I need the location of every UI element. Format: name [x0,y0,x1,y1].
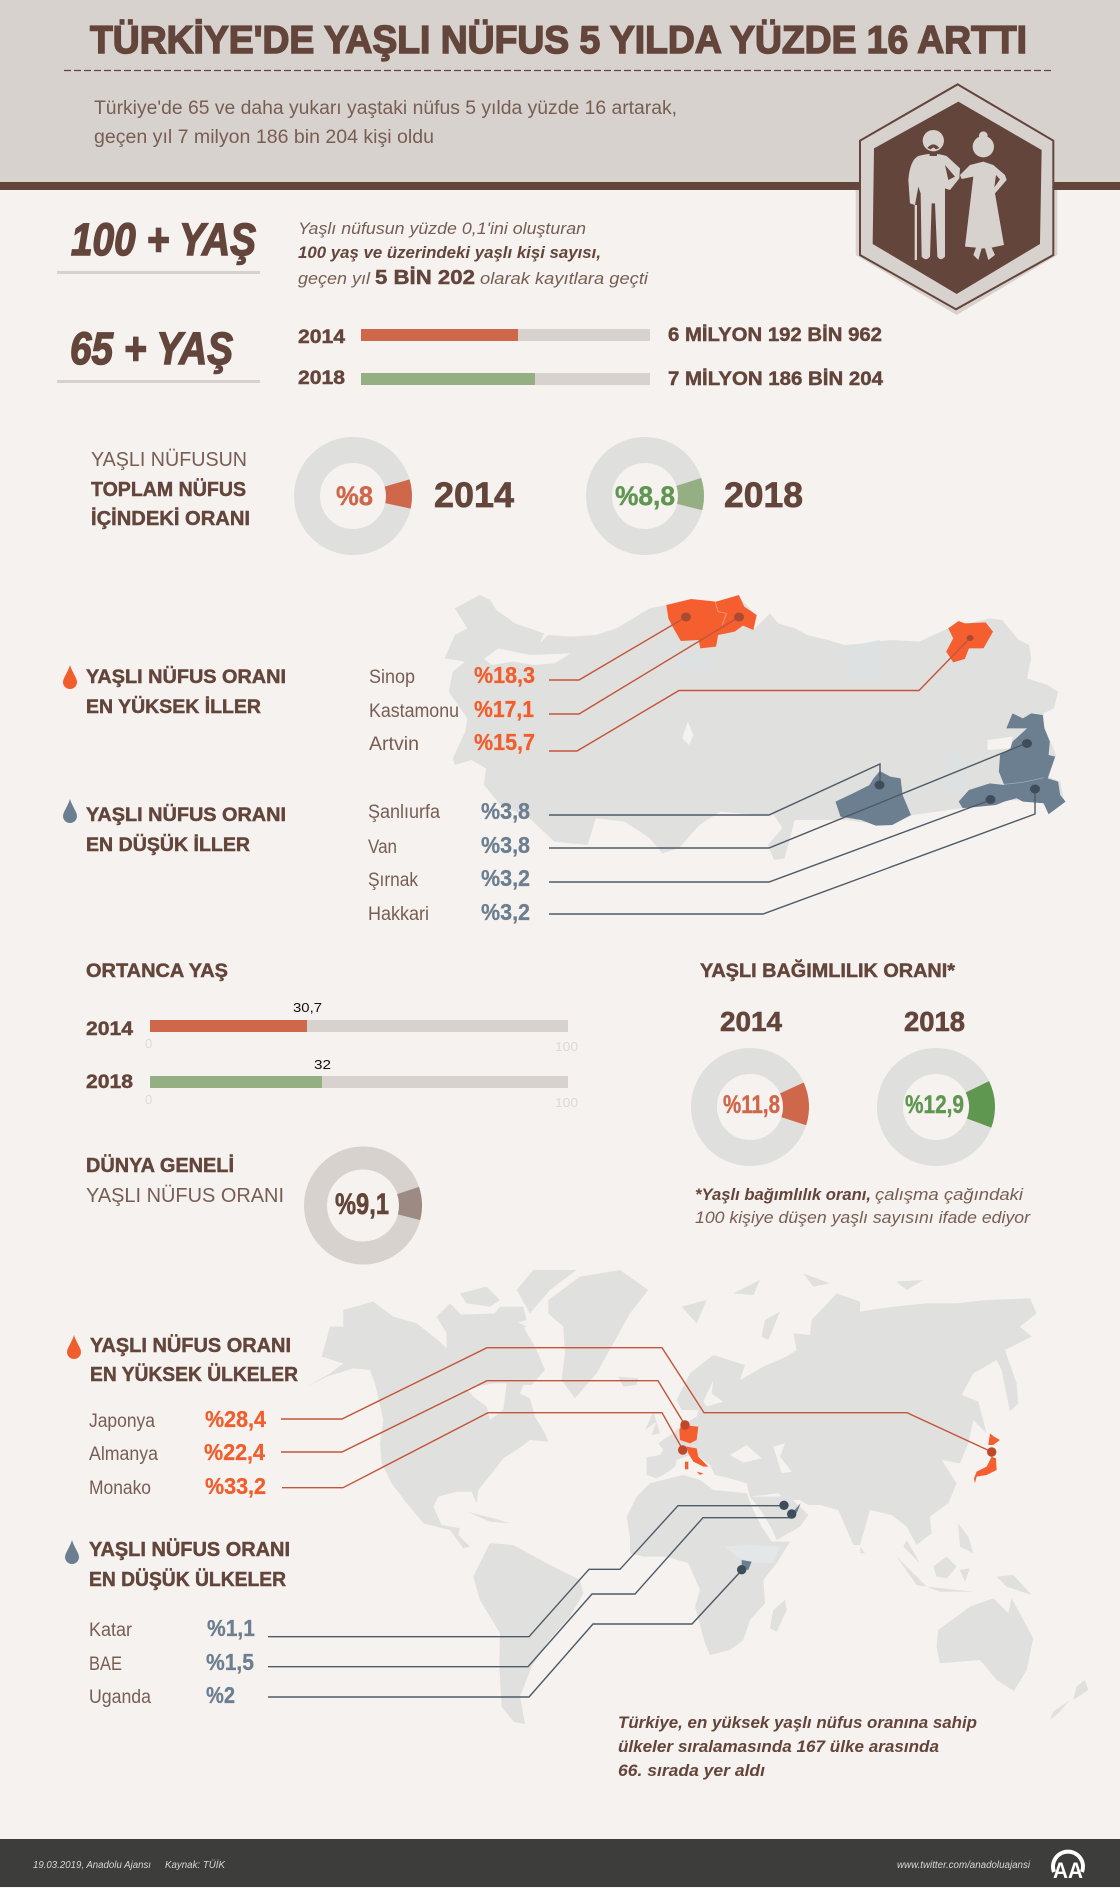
bar chart: 65+ population: 6 MİLYON 192 BİN 962 [668,325,882,346]
donut: world average: %9,1 [335,1188,389,1221]
share of total population label: YAŞLI NÜFUSUN [91,449,247,471]
list: lowest countries: %1,5 [206,1649,254,1675]
share of total population label [91,449,250,530]
100+ yaş description: Yaşlı nüfusun yüzde 0,1'ini oluşturan [298,219,586,238]
donut: dependency 2014 [689,1006,811,1168]
list: lowest provinces: %3,2 [481,899,530,925]
donut: world average [303,1145,423,1266]
list: highest provinces: %17,1 [474,696,534,722]
100+ yaş heading: 100 + YAŞ [71,214,256,265]
donut: 2014 share: %8 [336,481,373,511]
heading: lowest provinces: EN DÜŞÜK İLLER [86,835,250,856]
map: Türkiye [445,595,1066,860]
100+ yaş description: 100 yaş ve üzerindeki yaşlı kişi sayısı, [298,243,601,262]
list: highest provinces: Sinop [369,667,415,688]
list: lowest countries: Katar [89,1620,133,1641]
icon: Anadolu Agency logo: AA [1053,1858,1083,1883]
bar chart: median age [86,961,578,1110]
header panel [0,0,1120,190]
bar chart: median age: ORTANCA YAŞ [86,961,228,982]
share of total population label: TOPLAM NÜFUS [91,478,246,501]
subtitle text: Türkiye'de 65 ve daha yukarı yaştaki nüfus 5 yılda yüzde 16 artarak, [94,98,677,119]
bar chart: median age: 32 [314,1057,331,1072]
subtitle text: geçen yıl 7 milyon 186 bin 204 kişi oldu [94,127,434,148]
heading: lowest countries [65,1538,290,1591]
heading: highest provinces [63,665,286,718]
heading: highest countries: YAŞLI NÜFUS ORANI [90,1334,291,1357]
heading: lowest countries: EN DÜŞÜK ÜLKELER [89,1568,287,1591]
list: highest provinces: %18,3 [474,662,535,688]
callout: Türkiye ranking [618,1713,977,1780]
heading: lowest countries: YAŞLI NÜFUS ORANI [89,1538,290,1561]
heading: old-age dependency ratio: YAŞLI BAĞIMLILIK ORANI* [700,960,956,982]
donut: 2018 share [599,450,803,542]
heading: highest provinces: YAŞLI NÜFUS ORANI [86,667,286,688]
bar chart: median age: 2014 [86,1019,133,1040]
100+ yaş description: 5 BİN 202 [375,266,475,289]
100+ yaş description [298,219,649,289]
bar chart: median age: 100 [555,1095,578,1110]
footer bar: 19.03.2019, Anadolu Ajansı [33,1860,151,1871]
list: highest provinces: %15,7 [474,729,535,755]
list: highest countries: Japonya [89,1411,155,1432]
callout: Türkiye ranking: ülkeler sıralamasında 167 ülke arasında [618,1737,939,1756]
list: lowest countries: Uganda [89,1687,151,1708]
list: highest provinces: Artvin [369,734,419,755]
list: lowest provinces: Hakkari [368,904,429,925]
list: highest provinces: Kastamonu [369,701,459,722]
list: lowest countries [89,1615,255,1708]
footer bar: Kaynak: TÜİK [165,1859,226,1871]
list: lowest provinces: Van [368,837,397,858]
heading: lowest provinces: YAŞLI NÜFUS ORANI [86,805,286,826]
list: highest countries: %28,4 [205,1406,266,1432]
label: world average: DÜNYA GENELİ [86,1154,234,1177]
heading: highest provinces: EN YÜKSEK İLLER [86,697,261,718]
label: world average: YAŞLI NÜFUS ORANI [86,1185,284,1207]
icon: elderly couple hexagon badge [856,84,1057,315]
list: lowest countries: %2 [206,1682,235,1708]
bar chart: median age: 30,7 [293,1000,322,1015]
list: highest countries: Monako [89,1478,151,1499]
donut: 2014 share [307,450,515,542]
donut: dependency 2014: %11,8 [723,1091,780,1119]
bar chart: 65+ population: 2018 [298,368,345,389]
heading: lowest provinces [63,799,286,856]
donut: dependency 2018: %12,9 [905,1091,964,1119]
title: TÜRKİYE'DE YAŞLI NÜFUS 5 YILDA YÜZDE 16 ARTTI [90,19,1027,62]
100+ yaş description: geçen yıl [298,269,371,288]
connectors: highest countries [281,1348,996,1488]
heading: highest countries [67,1334,299,1386]
footnote: dependency definition: *Yaşlı bağımlılık oranı, [695,1185,871,1204]
list: highest provinces [369,662,535,755]
connectors: lowest countries [268,1501,796,1697]
bar chart: median age: 0 [145,1036,152,1051]
footnote: dependency definition: çalışma çağındaki [875,1185,1024,1204]
footer bar [0,1839,1120,1887]
connectors: lowest provinces [549,739,1040,914]
list: lowest provinces: Şanlıurfa [368,802,440,823]
donut: 2018 share: 2018 [724,476,803,515]
donut: 2018 share: %8,8 [615,481,675,511]
heading: highest countries: EN YÜKSEK ÜLKELER [90,1363,299,1386]
bar chart: median age: 100 [555,1039,578,1054]
map: world [307,1270,1088,1724]
list: lowest provinces: Şırnak [368,870,418,891]
share of total population label: İÇİNDEKİ ORANI [91,507,250,530]
subtitle text [94,98,677,148]
65+ yaş heading: 65 + YAŞ [70,323,233,374]
list: highest countries [89,1406,266,1499]
bar chart: 65+ population: 7 MİLYON 186 BİN 204 [668,369,883,390]
list: lowest provinces [368,798,530,925]
footer bar: www.twitter.com/anadoluajansi [897,1860,1031,1871]
donut: 2014 share: 2014 [434,476,515,515]
list: lowest provinces: %3,2 [481,865,530,891]
bar chart: median age: 2018 [86,1072,133,1093]
list: highest countries: Almanya [89,1444,158,1465]
donut: dependency 2018: 2018 [904,1006,965,1037]
footnote: dependency definition [695,1185,1031,1227]
list: highest countries: %22,4 [204,1439,265,1465]
footnote: dependency definition: 100 kişiye düşen yaşlı sayısını ifade ediyor [695,1208,1031,1227]
list: lowest countries: BAE [89,1654,122,1675]
list: lowest countries: %1,1 [207,1615,255,1641]
callout: Türkiye ranking: 66. sırada yer aldı [618,1761,765,1780]
callout: Türkiye ranking: Türkiye, en yüksek yaşlı nüfus oranına sahip [618,1713,977,1732]
bar chart: median age: 0 [145,1092,152,1107]
donut: dependency 2018 [874,1006,998,1169]
list: highest countries: %33,2 [205,1473,266,1499]
bar chart: 65+ population [298,325,883,390]
donut: dependency 2014: 2014 [720,1006,782,1037]
label: world average [86,1154,284,1207]
bar chart: 65+ population: 2014 [298,327,345,348]
connectors: highest provinces [549,612,974,751]
list: lowest provinces: %3,8 [481,798,530,824]
100+ yaş description: olarak kayıtlara geçti [480,269,649,288]
list: lowest provinces: %3,8 [481,832,530,858]
